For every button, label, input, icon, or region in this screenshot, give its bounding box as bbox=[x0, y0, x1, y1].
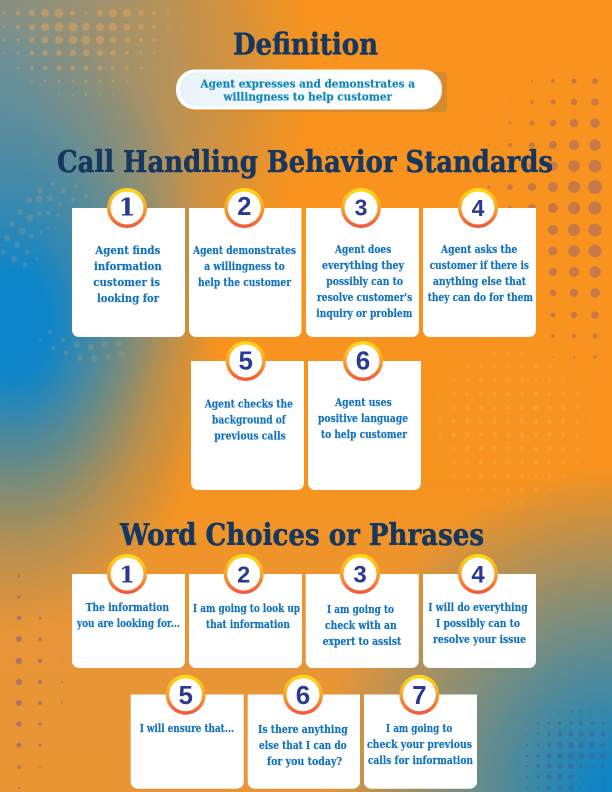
card text: else that I can do bbox=[259, 739, 347, 752]
card text bbox=[367, 722, 473, 767]
halftone dots: top right bbox=[466, 78, 602, 378]
badge 2: 2 bbox=[237, 193, 251, 221]
card text: information bbox=[94, 260, 162, 273]
badge 7: 7 bbox=[412, 680, 427, 710]
halftone dots: top left bbox=[3, 8, 182, 96]
badge 4: 4 bbox=[471, 562, 485, 588]
card text: help the customer bbox=[198, 276, 291, 289]
card text: they can do for them bbox=[428, 291, 533, 304]
card text: I am going to bbox=[327, 603, 394, 616]
card text: resolve your issue bbox=[433, 633, 526, 646]
phrase card 5 bbox=[131, 675, 244, 789]
phrase card 3 bbox=[306, 554, 419, 668]
definition text: Agent expresses and demonstrates a bbox=[200, 76, 415, 90]
card text: Agent checks the bbox=[204, 398, 293, 411]
card text: I possibly can to bbox=[436, 617, 520, 630]
badge 3 bbox=[341, 188, 381, 228]
card text: Agent uses bbox=[334, 396, 392, 409]
card text: that information bbox=[206, 618, 290, 631]
card text: Agent does bbox=[334, 243, 391, 256]
badge 6: 6 bbox=[296, 680, 310, 710]
card text: positive language bbox=[318, 412, 408, 425]
card text bbox=[258, 723, 348, 768]
card text: resolve customer's bbox=[317, 291, 412, 304]
badge 1 bbox=[107, 188, 147, 228]
card text: everything they bbox=[322, 259, 405, 272]
halftone dots: bottom right bbox=[516, 701, 606, 791]
badge 1: 1 bbox=[119, 562, 135, 588]
badge 5: 5 bbox=[238, 346, 253, 376]
card text: previous calls bbox=[214, 430, 286, 443]
card text: customer if there is bbox=[430, 259, 529, 272]
badge 3: 3 bbox=[355, 194, 367, 220]
badge 3: 3 bbox=[353, 562, 367, 588]
card text: I will do everything bbox=[428, 601, 528, 614]
card text: check with an bbox=[325, 619, 397, 632]
badge 4: 4 bbox=[472, 195, 485, 221]
card text: a willingness to bbox=[204, 260, 285, 273]
badge 1: 1 bbox=[119, 192, 135, 222]
card text bbox=[428, 601, 528, 646]
card text: The information bbox=[86, 601, 169, 614]
card text: calls for information bbox=[368, 754, 473, 767]
card text bbox=[323, 603, 402, 648]
card text: I am going to look up bbox=[193, 602, 300, 615]
standards card 1 bbox=[72, 188, 185, 337]
phrase card 7 bbox=[364, 675, 477, 789]
phrase card 2 bbox=[189, 554, 302, 668]
title: Word Choices or Phrases: Word Choices or Phrases bbox=[119, 518, 484, 553]
phrase card 1 bbox=[72, 554, 185, 668]
card text: Agent demonstrates bbox=[192, 244, 296, 257]
card text: I am going to bbox=[386, 722, 452, 735]
card text: Agent finds bbox=[94, 244, 160, 257]
card text: looking for bbox=[97, 292, 159, 305]
card text bbox=[93, 244, 162, 305]
card text: expert to assist bbox=[323, 635, 402, 648]
badge 6 bbox=[343, 341, 383, 381]
definition text: willingness to help customer bbox=[223, 90, 393, 104]
definition pill bbox=[176, 70, 447, 112]
card text bbox=[318, 396, 408, 441]
card text: inquiry or problem bbox=[316, 307, 413, 320]
card text bbox=[204, 398, 293, 443]
phrase card 4 bbox=[423, 554, 536, 668]
card text: anything else that bbox=[433, 275, 527, 288]
card text: customer is bbox=[93, 276, 160, 289]
card text: for you today? bbox=[267, 755, 342, 768]
definition text bbox=[200, 76, 415, 104]
badge 5: 5 bbox=[178, 680, 193, 710]
card text bbox=[193, 602, 300, 631]
halftone dots: bottom left bbox=[16, 575, 63, 789]
card text: I will ensure that... bbox=[140, 722, 234, 735]
card text bbox=[192, 244, 296, 289]
standards card 2 bbox=[189, 188, 302, 337]
standards card 3 bbox=[306, 188, 419, 337]
card text bbox=[76, 601, 180, 630]
card text: to help customer bbox=[321, 428, 407, 441]
standards card 5 bbox=[191, 341, 304, 490]
card text: check your previous bbox=[367, 738, 472, 751]
card text: possibly can to bbox=[326, 275, 403, 288]
card text bbox=[316, 243, 413, 320]
card text: Agent asks the bbox=[440, 243, 517, 256]
card text: background of bbox=[212, 414, 287, 427]
card text: you are looking for... bbox=[76, 617, 180, 630]
card text: Is there anything bbox=[258, 723, 348, 736]
badge 5 bbox=[226, 341, 266, 381]
standards card 6 bbox=[308, 341, 421, 490]
badge 6: 6 bbox=[356, 346, 370, 376]
badge 2 bbox=[224, 188, 264, 228]
standards card 4 bbox=[423, 188, 536, 337]
halftone dots: right centre light bbox=[452, 364, 578, 491]
halftone dots: left blue area bbox=[0, 182, 125, 361]
card text bbox=[428, 243, 533, 304]
title: Definition: Definition bbox=[233, 28, 378, 62]
badge 4 bbox=[458, 188, 498, 228]
badge 2: 2 bbox=[237, 562, 250, 588]
phrase card 6 bbox=[248, 675, 360, 789]
